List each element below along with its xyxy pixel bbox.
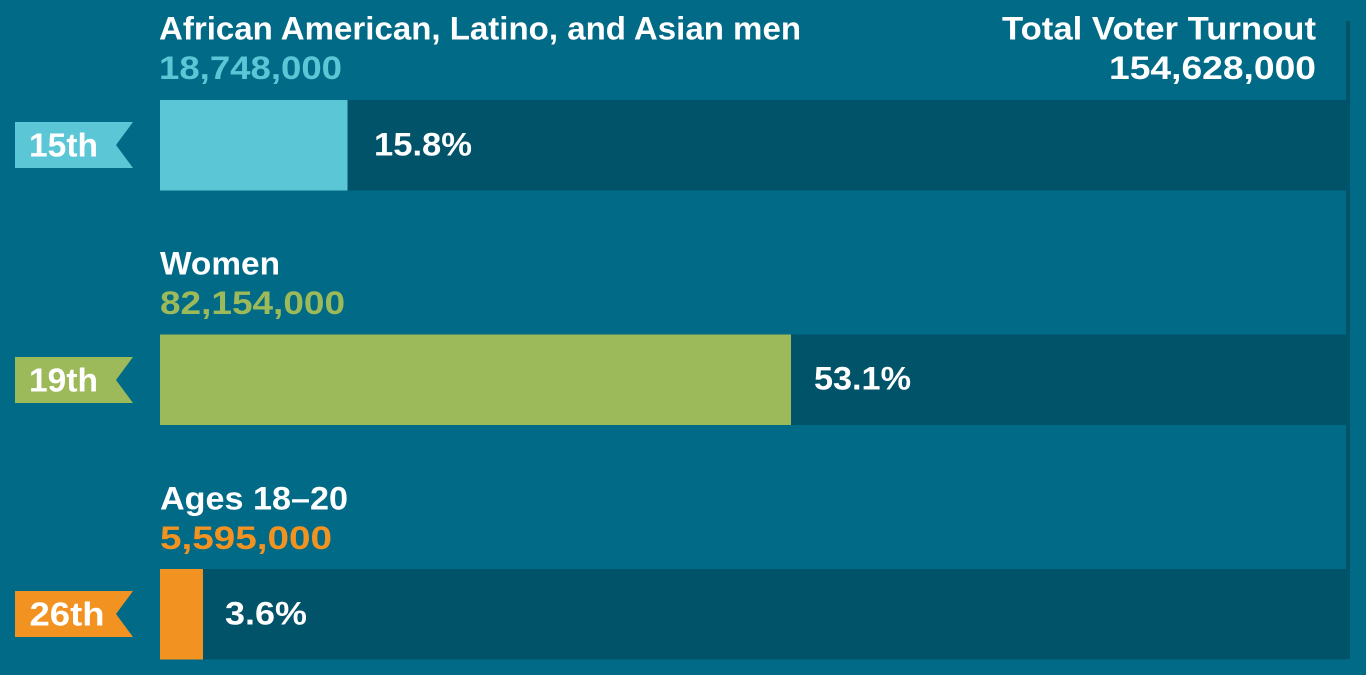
heading: Ages 18–20: Ages 18–20 <box>160 480 348 516</box>
bar: 3.6% <box>160 569 203 660</box>
bar track: 19th <box>160 334 1346 425</box>
figure: 5,595,000: 5,595,000 <box>160 520 332 556</box>
heading: Total Voter Turnout: Total Voter Turnout <box>1002 10 1316 46</box>
ribbon: 26th <box>15 591 133 637</box>
ribbon: 15th: 15th <box>29 126 98 164</box>
panel: total voter turnout <box>1002 10 1316 86</box>
bar: 53.1% <box>160 334 791 425</box>
panel: 19th amendment <box>15 246 1346 425</box>
figure: 82,154,000: 82,154,000 <box>160 285 345 321</box>
ribbon: 15th <box>15 122 133 168</box>
ribbon: 26th: 26th <box>30 596 104 632</box>
value: 53.1%: 53.1% <box>814 360 911 396</box>
heading: Women: Women <box>160 246 280 282</box>
axis line: total turnout boundary <box>1346 21 1350 659</box>
ribbon: 19th: 19th <box>29 362 98 398</box>
value: 15.8%: 15.8% <box>374 126 472 162</box>
figure: 18,748,000: 18,748,000 <box>159 50 342 86</box>
ribbon: 19th <box>15 357 133 403</box>
bar track: 15th <box>160 100 1346 190</box>
panel: 15th amendment <box>15 10 1346 190</box>
bar: 15.8% <box>160 100 348 190</box>
panel: 26th amendment <box>15 480 1346 660</box>
value: 3.6%: 3.6% <box>225 596 307 632</box>
figure: 154,628,000: 154,628,000 <box>1109 50 1316 86</box>
heading: African American, Latino, and Asian men: African American, Latino, and Asian men <box>159 10 801 46</box>
bar track: 26th <box>160 569 1346 660</box>
